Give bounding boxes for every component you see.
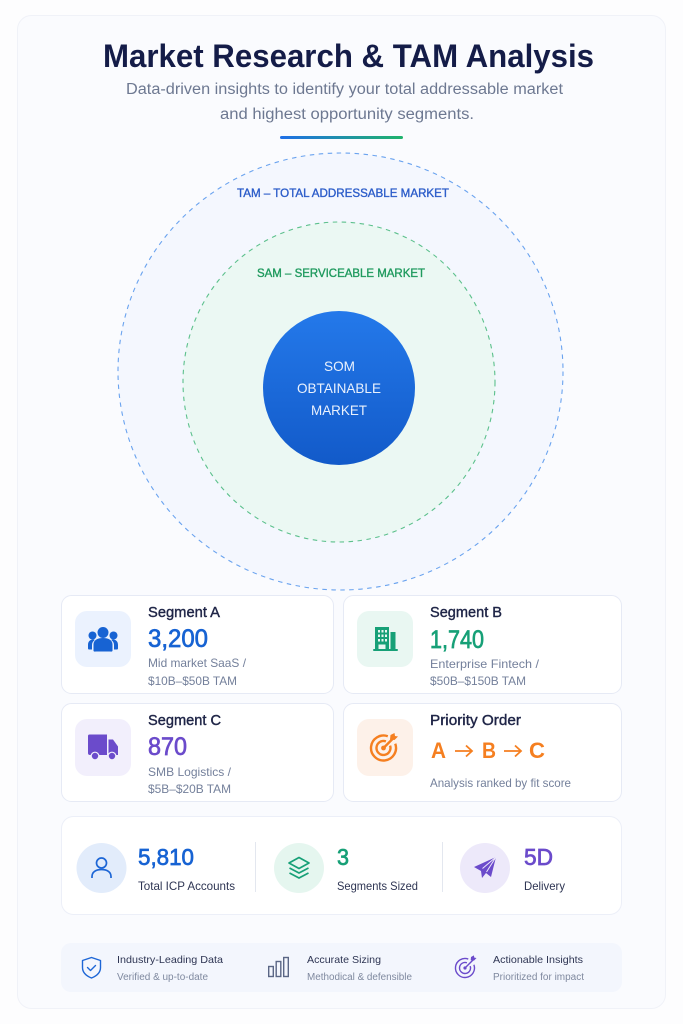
title: Accurate Sizing: [307, 954, 381, 966]
panel: Segment C: [62, 704, 334, 802]
value: priority sequence: A: [431, 738, 446, 763]
description: $5B–$20B TAM: [148, 782, 231, 796]
value: 1,740: [430, 626, 484, 654]
icon: user: [76, 843, 126, 893]
label: Total ICP Accounts: [138, 879, 235, 893]
description: $50B–$150B TAM: [430, 674, 526, 688]
arrow: [504, 746, 521, 756]
circle: SAM: [183, 222, 495, 542]
description: Analysis ranked by fit score: [430, 776, 571, 790]
title: Industry-Leading Data: [117, 954, 223, 966]
label: SOM: [297, 358, 381, 418]
description: [148, 656, 247, 688]
value: priority sequence: [431, 738, 545, 763]
panel: Priority Order: [344, 704, 622, 802]
icon: building: [357, 611, 413, 667]
icon: paper plane: [460, 843, 510, 893]
stat: delivery: [460, 843, 565, 893]
subtitle: Data-driven insights to identify your total addressable market: [126, 81, 564, 98]
caption: Verified & up-to-date: [117, 972, 208, 983]
title: Market Research & TAM Analysis: [103, 38, 594, 74]
label: TAM: TAM – TOTAL ADDRESSABLE MARKET: [237, 186, 450, 200]
value: 3: [337, 844, 349, 870]
stat: segments sized: [274, 843, 418, 893]
value: priority sequence: C: [529, 738, 545, 763]
label: Delivery: [524, 879, 565, 893]
value: 870: [148, 733, 187, 761]
arrow: [455, 746, 472, 756]
description: [430, 657, 540, 688]
icon: bar chart: [269, 958, 288, 976]
circle: TAM: [118, 153, 563, 590]
label: Segments Sized: [337, 879, 418, 893]
chart: TAM SAM SOM concentric circles: [118, 153, 563, 590]
heading: Segment B: [430, 605, 502, 621]
icon: target: [357, 719, 413, 776]
heading: Segment A: [148, 605, 220, 621]
icon: target: [455, 955, 476, 977]
description: [148, 765, 232, 796]
icon: shield: [82, 958, 100, 978]
title divider: [280, 136, 403, 139]
stat: total ICP accounts: [76, 843, 235, 893]
panel: Segment B: [344, 596, 622, 694]
feature: actionable insights: [455, 954, 584, 983]
panel: Segment A: [62, 596, 334, 694]
heading: Segment C: [148, 713, 221, 729]
subtitle: and highest opportunity segments.: [220, 106, 474, 123]
icon: truck: [75, 719, 131, 776]
value: 5,810: [138, 844, 194, 870]
label: SOM: SOM: [324, 358, 355, 374]
label: SOM: OBTAINABLE: [297, 380, 381, 396]
caption: Prioritized for impact: [493, 972, 584, 983]
label: SAM: SAM – SERVICEABLE MARKET: [257, 266, 426, 280]
circle: SOM: [263, 311, 415, 465]
description: Enterprise Fintech /: [430, 657, 540, 671]
label: SOM: MARKET: [311, 402, 367, 418]
description: Mid market SaaS /: [148, 656, 247, 670]
panel: footer strip: [61, 943, 622, 992]
feature: industry-leading data: [82, 954, 223, 983]
subtitle: [126, 81, 564, 123]
description: $10B–$50B TAM: [148, 674, 237, 688]
icon: layers: [274, 843, 324, 893]
feature: accurate sizing: [269, 954, 412, 983]
panel: summary stats: [62, 816, 622, 914]
icon: people: [75, 611, 131, 667]
value: priority sequence: B: [482, 738, 496, 763]
description: SMB Logistics /: [148, 765, 232, 779]
heading: Priority Order: [430, 713, 521, 729]
value: 5D: [524, 844, 553, 870]
value: 3,200: [148, 625, 208, 653]
caption: Methodical & defensible: [307, 972, 412, 983]
title: Actionable Insights: [493, 954, 583, 966]
